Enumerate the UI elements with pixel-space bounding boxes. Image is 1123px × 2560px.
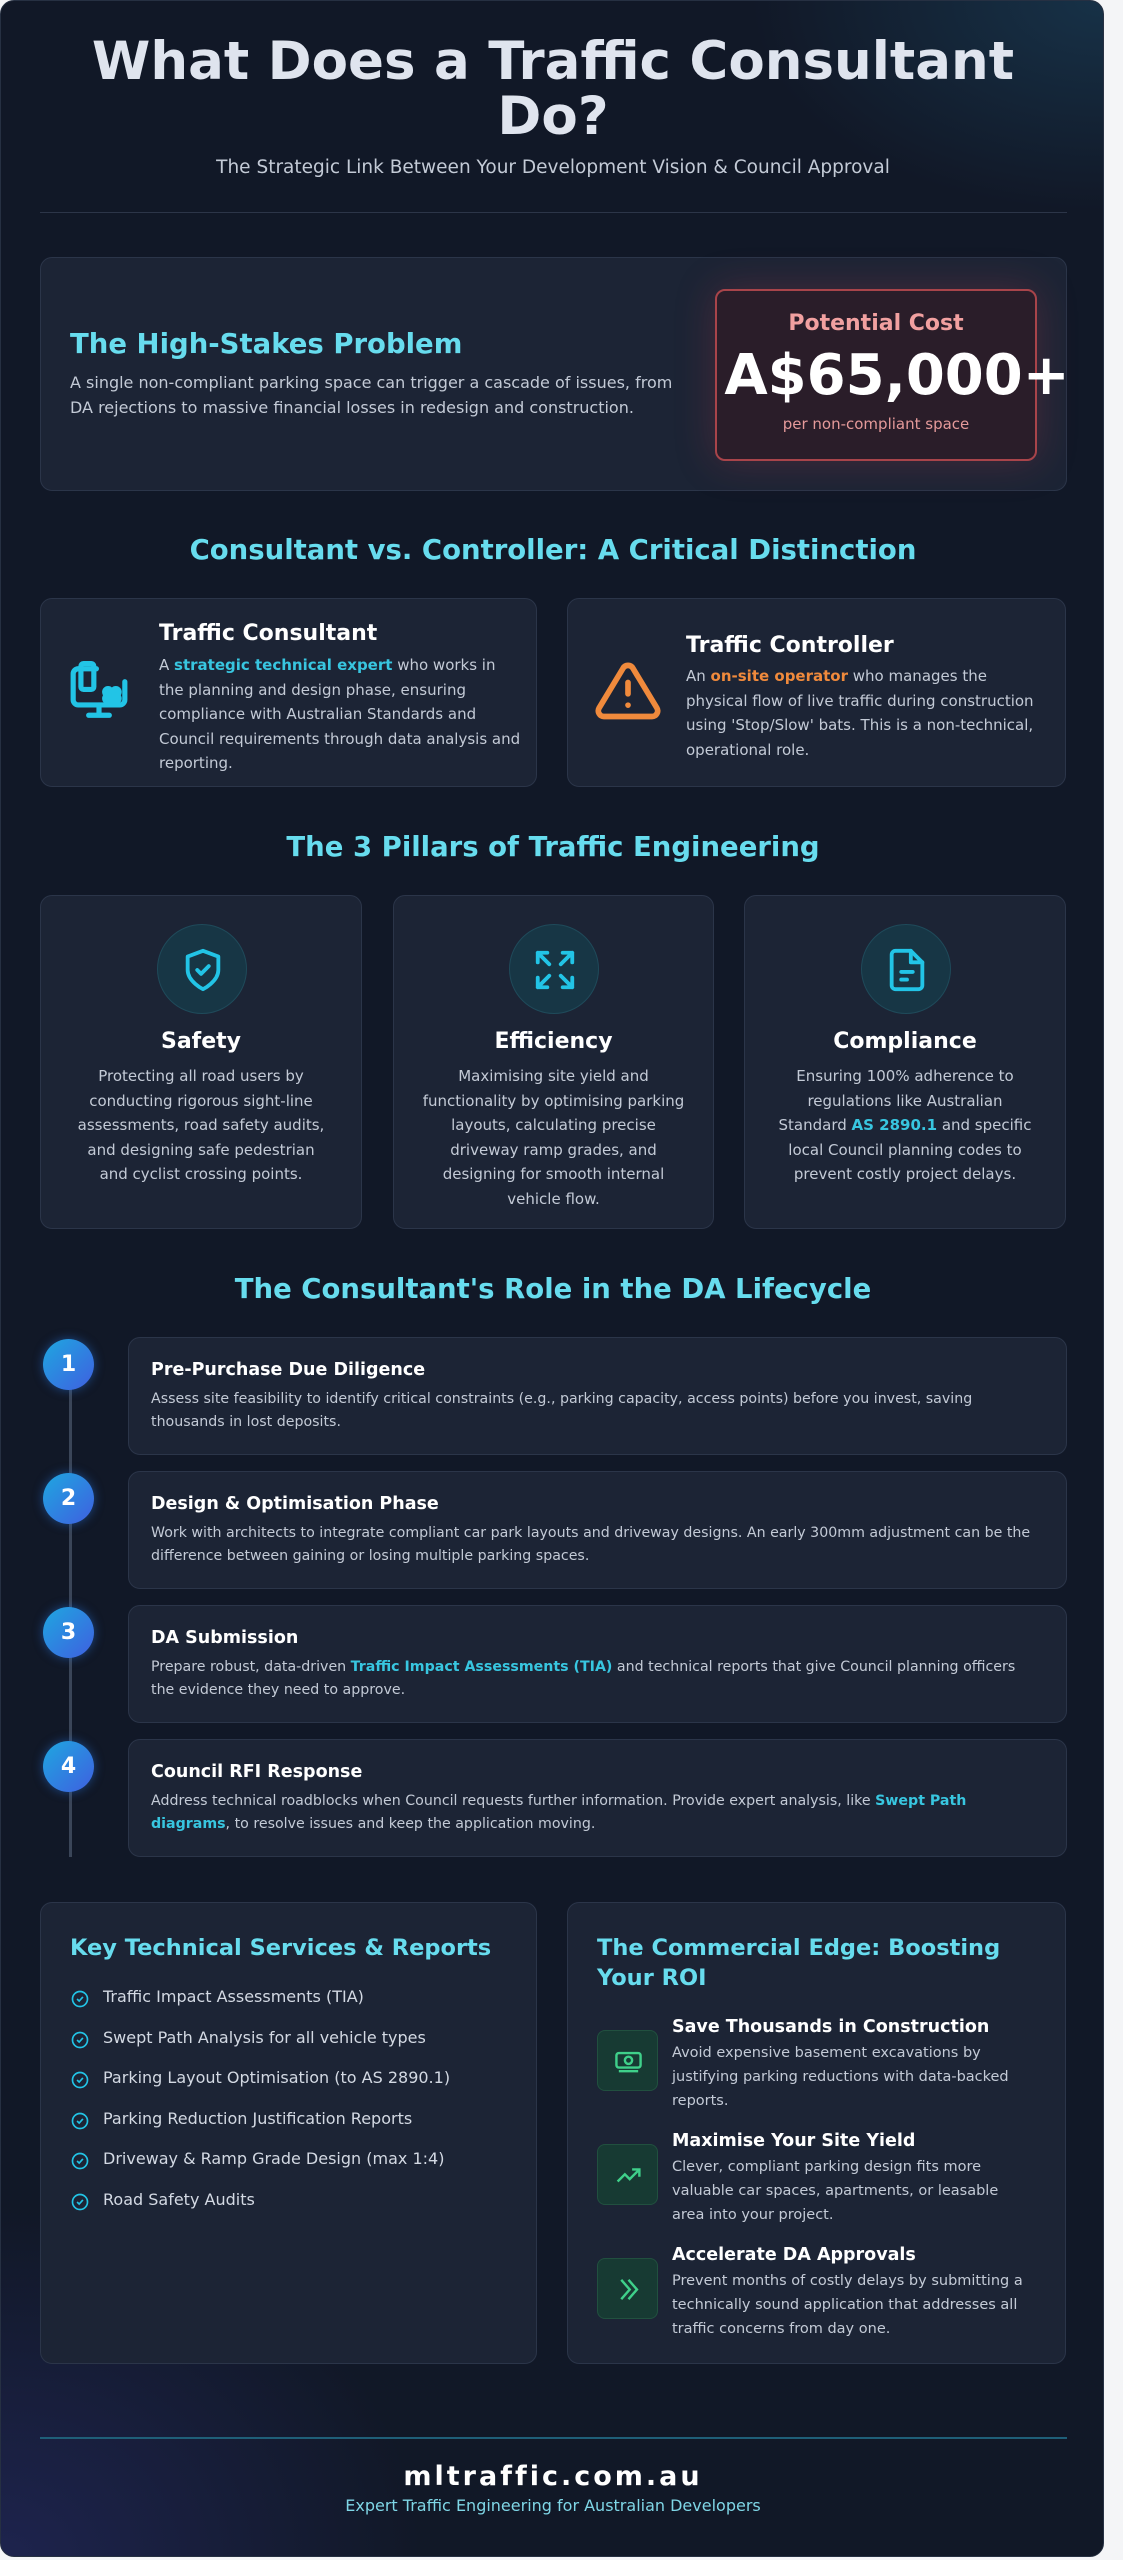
title <box>92 31 1014 147</box>
services list: Swept Path Analysis for all vehicle types <box>103 2028 426 2046</box>
step 4 <box>37 1735 1067 1857</box>
benefit: save: Avoid expensive basement excavations by justifying parking reductions with data-backed reports. <box>672 2045 1009 2109</box>
efficiency text: Maximising site yield and functionality by optimising parking layouts, calculating precise driveway ramp grades, and designing for smooth internal vehicle flow. <box>423 1067 684 1208</box>
safety text: Protecting all road users by conducting rigorous sight-line assessments, road safety audits, and designing safe pedestrian and cyclist crossing points. <box>78 1067 324 1183</box>
benefit: accelerate: Accelerate DA Approvals <box>672 2245 916 2265</box>
consultant title: Traffic Consultant <box>159 621 377 646</box>
benefit: yield: Maximise Your Site Yield <box>672 2131 915 2151</box>
services list: Parking Reduction Justification Reports <box>103 2108 412 2128</box>
benefit: yield <box>597 2131 998 2223</box>
benefit: save <box>597 2017 1009 2109</box>
consultant text: A strategic technical expert who works in the planning and design phase, ensuring compliance with Australian Standards and Council requirements through data analysis and reporting. <box>159 656 520 772</box>
safety title: Safety <box>161 1029 241 1054</box>
panel: traffic consultant <box>40 598 537 787</box>
services list: Traffic Impact Assessments (TIA) <box>103 1987 364 2006</box>
services list: Parking Layout Optimisation (to AS 2890.1) <box>103 2068 450 2087</box>
footer: mltraffic.com.au <box>403 2461 703 2492</box>
services heading: Key Technical Services & Reports <box>70 1935 491 1961</box>
footer: Expert Traffic Engineering for Australian Developers <box>345 2496 761 2515</box>
benefit: save: Save Thousands in Construction <box>672 2017 989 2037</box>
services list: Driveway & Ramp Grade Design (max 1:4) <box>103 2149 444 2168</box>
commercial heading: The Commercial Edge: Boosting Your ROI <box>597 1935 1000 1991</box>
heading: 3 pillars: The 3 Pillars of Traffic Engineering <box>286 831 820 863</box>
benefit: yield: Clever, compliant parking design fits more valuable car spaces, apartments, or leasable area into your project. <box>672 2159 998 2223</box>
services list: Road Safety Audits <box>103 2190 255 2208</box>
services list <box>72 1987 450 2210</box>
timeline <box>37 1333 1067 1857</box>
step 4: Council RFI Response <box>151 1762 362 1782</box>
panel: commercial edge <box>567 1902 1066 2364</box>
panel: safety <box>40 895 362 1229</box>
step 1: 1 <box>61 1352 76 1377</box>
compliance title: Compliance <box>833 1029 977 1054</box>
icon: monitor <box>70 661 128 718</box>
icon: document <box>861 924 951 1014</box>
callout: potential cost: Potential Cost <box>788 311 964 336</box>
benefit: accelerate: Prevent months of costly delays by submitting a technically sound application that addresses all traffic concerns from day one. <box>672 2273 1023 2337</box>
icon: expand <box>509 924 599 1014</box>
heading: DA lifecycle: The Consultant's Role in the DA Lifecycle <box>235 1273 871 1305</box>
benefit: accelerate <box>597 2245 1023 2337</box>
controller text: An on-site operator who manages the physical flow of live traffic during construction using 'Stop/Slow' bats. This is a non-technical, operational role. <box>686 667 1034 758</box>
callout: potential cost <box>715 289 1037 461</box>
callout: potential cost: per non-compliant space <box>783 415 969 433</box>
step 4: 4 <box>61 1754 76 1779</box>
step 2: 2 <box>61 1486 76 1511</box>
step 2 <box>37 1467 1067 1589</box>
controller title: Traffic Controller <box>686 633 894 658</box>
step 1: Pre-Purchase Due Diligence <box>151 1360 425 1380</box>
step 3 <box>37 1601 1067 1723</box>
footer <box>345 2461 761 2515</box>
step 1 <box>37 1333 1067 1455</box>
subtitle: The Strategic Link Between Your Development Vision & Council Approval <box>216 157 890 178</box>
title: What Does a Traffic Consultant <box>92 31 1014 92</box>
step 2: Work with architects to integrate compliant car park layouts and driveway designs. An early 300mm adjustment can be the difference between gaining or losing multiple parking spaces. <box>151 1525 1030 1564</box>
step 3: 3 <box>61 1620 76 1645</box>
step 1: Assess site feasibility to identify critical constraints (e.g., parking capacity, access points) before you invest, saving thousands in lost deposits. <box>151 1391 972 1430</box>
panel: compliance <box>744 895 1066 1229</box>
step 4: Address technical roadblocks when Council requests further information. Provide expert analysis, like Swept Path diagrams, to resolve issues and keep the application moving. <box>151 1793 966 1832</box>
panel: efficiency <box>393 895 714 1229</box>
step 2: Design & Optimisation Phase <box>151 1494 439 1514</box>
problem heading: The High-Stakes Problem <box>70 328 462 360</box>
efficiency title: Efficiency <box>494 1029 613 1054</box>
icon: warning <box>595 662 661 720</box>
panel: key technical services <box>40 1902 537 2364</box>
problem text: A single non-compliant parking space can trigger a cascade of issues, from DA rejections to massive financial losses in redesign and construction. <box>70 373 672 417</box>
step 3: DA Submission <box>151 1628 298 1648</box>
icon: shield <box>157 924 247 1014</box>
panel: high-stakes problem <box>40 257 1067 491</box>
callout: potential cost: A$65,000+ <box>724 343 1070 408</box>
heading: consultant vs controller: Consultant vs. Controller: A Critical Distinction <box>190 534 916 566</box>
compliance text: Ensuring 100% adherence to regulations like Australian Standard AS 2890.1 and specific local Council planning codes to prevent costly project delays. <box>778 1067 1031 1183</box>
title: Do? <box>497 86 609 147</box>
step 3: Prepare robust, data-driven Traffic Impact Assessments (TIA) and technical reports that give Council planning officers the evidence they need to approve. <box>151 1659 1015 1698</box>
panel: traffic controller <box>567 598 1066 787</box>
